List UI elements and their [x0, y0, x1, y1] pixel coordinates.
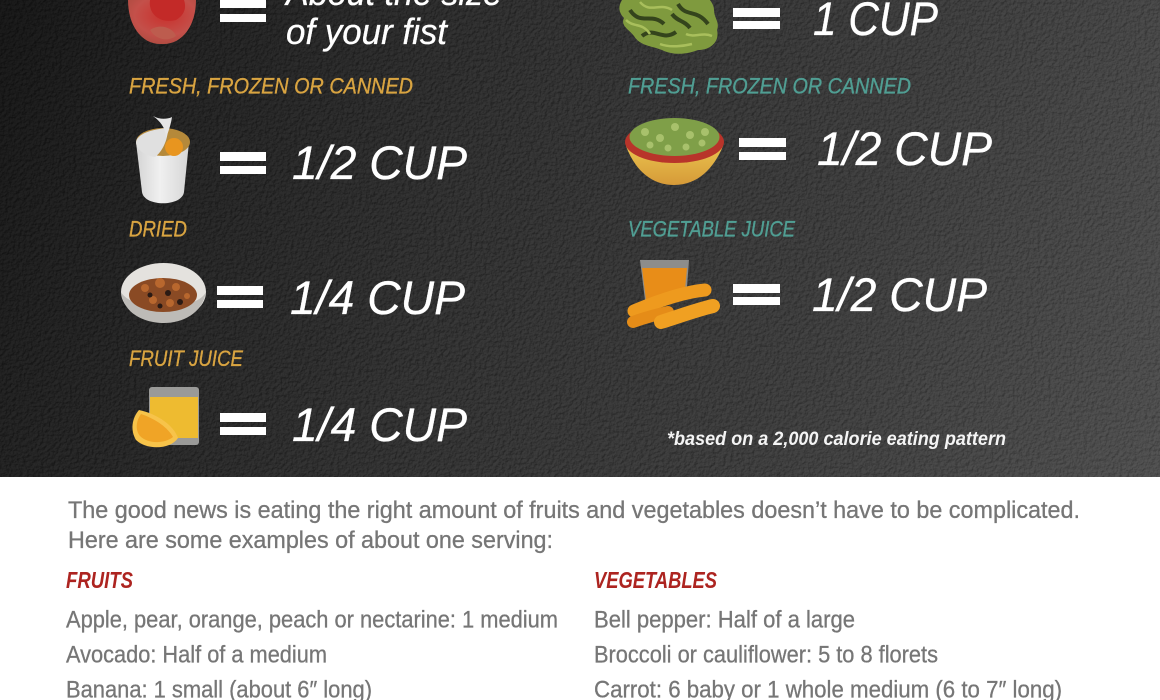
list: vegetable examples: [594, 567, 1062, 700]
label: dried fruit: DRIED: [129, 216, 187, 242]
icon: open can of fruit: [136, 116, 190, 203]
icon: equals sign, peas: [739, 138, 786, 160]
panel: vegetable servings column: [619, 0, 993, 322]
icon: lettuce: [619, 0, 718, 54]
panel: dark chalkboard background: [0, 0, 1160, 477]
icon: equals sign, fruit juice: [220, 413, 266, 435]
text: one quarter cup dried fruit: 1/4 CUP: [290, 271, 466, 324]
heading: vegetables: VEGETABLES: [594, 567, 718, 593]
text: one half cup vegetables: 1/2 CUP: [817, 122, 993, 175]
list item: apple: Apple, pear, orange, peach or nectarine: 1 medium: [66, 606, 558, 634]
panel: fruit servings column: [121, 0, 502, 451]
icon: equals sign, vegetable juice: [733, 284, 780, 305]
label: fruit juice: FRUIT JUICE: [129, 346, 243, 371]
icon: equals sign, whole fruit: [220, 0, 266, 22]
text: about the size of your fist: [284, 0, 502, 52]
label: fresh, frozen or canned vegetables: FRESH, FROZEN OR CANNED: [628, 74, 911, 98]
heading: fruits: FRUITS: [66, 567, 134, 593]
icon: equals sign, dried fruit: [217, 286, 263, 308]
icon: carrot juice and carrots: [633, 260, 713, 322]
icon: equals sign, canned fruit: [220, 152, 266, 174]
icon: bowl of dried fruit: [121, 263, 206, 323]
text block: introduction: The good news is eating the right amount of fruits and vegetables doesn’t have to be complicated.: [68, 497, 1080, 524]
icon: equals sign, lettuce: [733, 8, 780, 29]
label: fresh, frozen or canned fruit: FRESH, FROZEN OR CANNED: [129, 74, 413, 98]
text block: introduction: [68, 497, 1080, 554]
label: vegetable juice: VEGETABLE JUICE: [628, 216, 795, 242]
list item: broccoli: Broccoli or cauliflower: 5 to 8 florets: [594, 642, 938, 668]
list item: bell pepper: Bell pepper: Half of a large: [594, 606, 855, 634]
text: one half cup fruit: 1/2 CUP: [292, 136, 468, 189]
icon: apple: [128, 0, 196, 44]
list item: avocado: Avocado: Half of a medium: [66, 642, 327, 668]
text: one quarter cup juice: 1/4 CUP: [292, 398, 468, 451]
text block: introduction: Here are some examples of about one serving:: [68, 527, 553, 554]
text: one half cup juice: 1/2 CUP: [812, 268, 988, 321]
panel: serving examples: [0, 477, 1160, 700]
text: about the size of your fist: of your fist: [286, 11, 449, 52]
icon: bowl of peas: [625, 118, 724, 185]
list: fruit examples: [66, 567, 558, 700]
footnote: *based on a 2,000 calorie eating pattern: [667, 429, 1006, 450]
icon: orange juice and orange slice: [132, 387, 199, 447]
